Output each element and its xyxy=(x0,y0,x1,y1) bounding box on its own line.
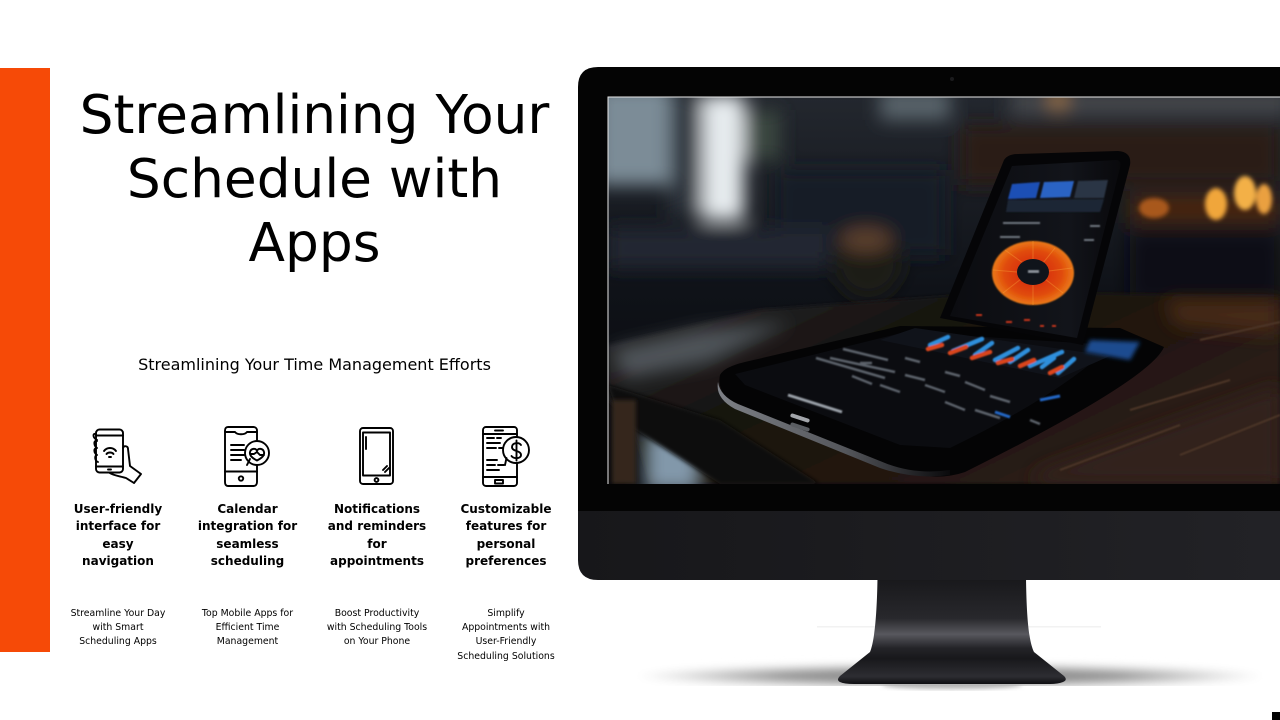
orange accent bar xyxy=(0,68,50,652)
feature heading: user-friendly: interface for xyxy=(76,519,160,533)
caption: simplify appointments: Appointments with xyxy=(462,622,550,633)
monitor stand xyxy=(838,578,1066,684)
caption: smart scheduling: Scheduling Apps xyxy=(79,636,157,647)
monitor body xyxy=(578,67,1280,580)
caption: simplify appointments: Scheduling Solutions xyxy=(457,651,555,662)
title xyxy=(80,83,550,274)
feature heading: user-friendly: easy xyxy=(102,537,134,551)
feature heading: calendar: scheduling xyxy=(211,554,284,568)
caption: simplify appointments: User-Friendly xyxy=(476,636,536,647)
monitor illustration xyxy=(578,67,1280,691)
feature heading: calendar: Calendar xyxy=(217,502,278,516)
caption: top mobile apps xyxy=(202,608,294,647)
feature heading: calendar: seamless xyxy=(216,537,279,551)
feature heading: user-friendly: navigation xyxy=(82,554,154,568)
caption: boost productivity: on Your Phone xyxy=(344,636,410,647)
title: Streamlining Your xyxy=(80,83,549,146)
caption: top mobile apps: Efficient Time xyxy=(216,622,279,633)
table xyxy=(608,292,1280,484)
feature heading: customizable xyxy=(460,502,552,568)
screen edge highlight xyxy=(608,97,1280,484)
feature heading: notifications: Notifications xyxy=(334,502,420,516)
feature heading: user-friendly xyxy=(74,502,162,568)
title: Apps xyxy=(249,211,380,274)
caption: top mobile apps: Management xyxy=(217,636,278,647)
icon: smartphone xyxy=(359,427,394,485)
title: Schedule with xyxy=(127,147,502,210)
feature heading: calendar xyxy=(198,502,298,568)
feature heading: customizable: personal xyxy=(477,537,535,551)
feature heading: calendar: integration for xyxy=(198,519,297,533)
caption: boost productivity xyxy=(327,608,427,647)
screen photo: phones on a table xyxy=(595,85,1280,492)
caption: smart scheduling: Streamline Your Day xyxy=(71,608,165,619)
shadow under stand xyxy=(635,626,1265,689)
icon: hand holding phone with wifi xyxy=(92,428,142,484)
feature heading: notifications: for xyxy=(367,537,387,551)
caption: top mobile apps: Top Mobile Apps for xyxy=(202,608,293,619)
caption: boost productivity: with Scheduling Tools xyxy=(327,622,427,633)
icon: phone with dollar message xyxy=(482,426,530,487)
feature heading: customizable: preferences xyxy=(466,554,546,568)
caption: simplify appointments: Simplify xyxy=(487,608,525,619)
feature heading: notifications xyxy=(328,502,426,568)
feature heading: customizable: features for xyxy=(466,519,546,533)
feature heading: customizable: Customizable xyxy=(460,502,552,516)
upright phone with donut chart xyxy=(940,151,1130,345)
feature heading: notifications: appointments xyxy=(330,554,424,568)
caption: boost productivity: Boost Productivity xyxy=(335,608,419,619)
caption: smart scheduling: with Smart xyxy=(92,622,143,633)
caption: smart scheduling xyxy=(71,608,166,647)
caption: simplify appointments xyxy=(457,608,555,662)
icon: phone with heart message xyxy=(224,426,270,487)
lying phone with bar chart xyxy=(718,326,1164,477)
corner marker xyxy=(1272,712,1280,720)
subtitle: Streamlining Your Time Management Efforts xyxy=(138,355,491,374)
feature heading: notifications: and reminders xyxy=(328,519,426,533)
feature heading: user-friendly: User-friendly xyxy=(74,502,162,516)
